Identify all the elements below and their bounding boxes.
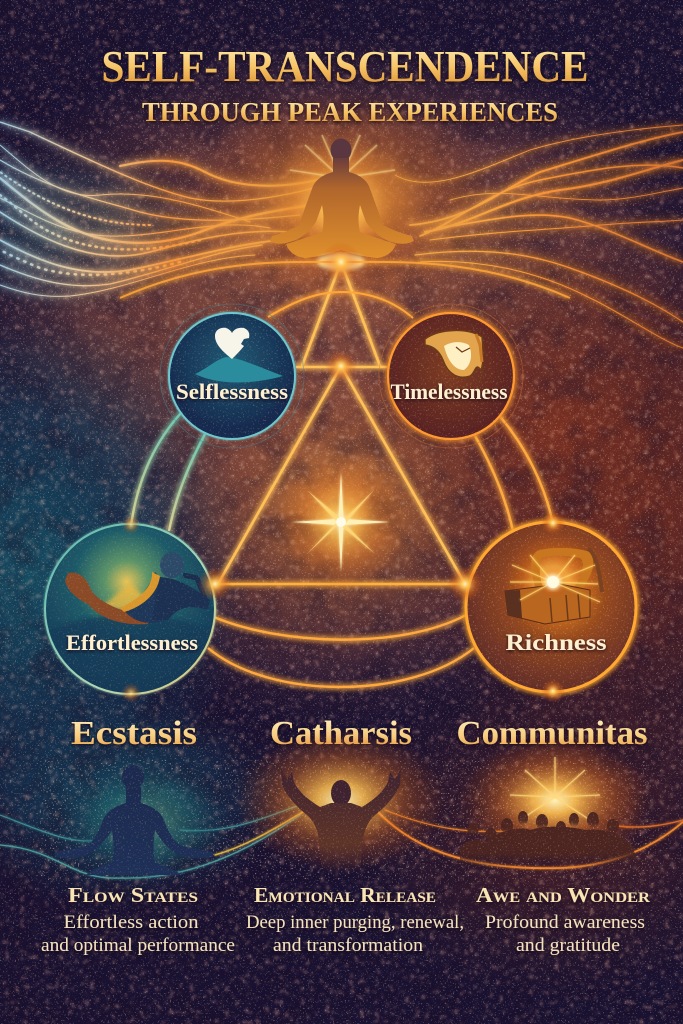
column: Ecstasis <box>41 715 235 956</box>
central star <box>273 242 409 590</box>
node: Effortlessness <box>42 522 218 696</box>
description: emotional release: Deep inner purging, renewal, <box>246 913 464 933</box>
heading: Communitas: Communitas <box>456 715 648 752</box>
description: flow states: Effortless action <box>64 913 198 933</box>
column: Catharsis: and transformation <box>273 936 423 956</box>
heading: Catharsis: Catharsis <box>270 715 412 752</box>
label: Richness: Richness <box>506 630 607 655</box>
star texture over lower figures <box>40 760 650 880</box>
icon: crowd under radiant light <box>460 738 650 868</box>
column: Communitas: and gratitude <box>516 936 620 956</box>
label: Timelessness: Timelessness <box>390 379 508 404</box>
icon: raised arms silhouette <box>236 728 446 875</box>
icon: mountain <box>195 357 283 382</box>
heading: main title: SELF-TRANSCENDENCE <box>102 42 588 91</box>
label: Selflessness: Selflessness <box>176 379 288 404</box>
icon: treasure chest <box>503 532 603 632</box>
energy ribbons: left <box>0 122 325 296</box>
description: awe and wonder: Profound awareness <box>485 913 645 933</box>
ring accent sparks <box>121 511 565 703</box>
icon: melting clock <box>425 330 483 377</box>
icon: heart <box>215 328 249 359</box>
column: Catharsis <box>236 715 464 956</box>
column: Communitas <box>456 715 650 956</box>
label: Effortlessness: Effortlessness <box>66 630 198 655</box>
label: Flow States: Flow States <box>68 883 198 907</box>
sacred geometry: triangles and connecting arcs <box>120 262 570 687</box>
label: Awe and Wonder: Awe and Wonder <box>476 883 650 907</box>
column: Ecstasis: and optimal performance <box>41 936 235 956</box>
heading: Ecstasis: Ecstasis <box>71 715 197 752</box>
node: Timelessness <box>379 304 523 448</box>
meditating figure: crown of the diagram <box>191 90 491 310</box>
icon: reclining figure <box>65 552 210 624</box>
energy ribbons: right <box>395 125 683 348</box>
node: Selflessness <box>160 304 304 448</box>
subtitle: THROUGH PEAK EXPERIENCES <box>142 97 558 127</box>
low flowing lines between the lower figures <box>0 805 683 878</box>
label: Emotional Release: Emotional Release <box>254 883 436 907</box>
node: Richness <box>465 522 637 694</box>
icon: meditating silhouette <box>55 760 230 884</box>
